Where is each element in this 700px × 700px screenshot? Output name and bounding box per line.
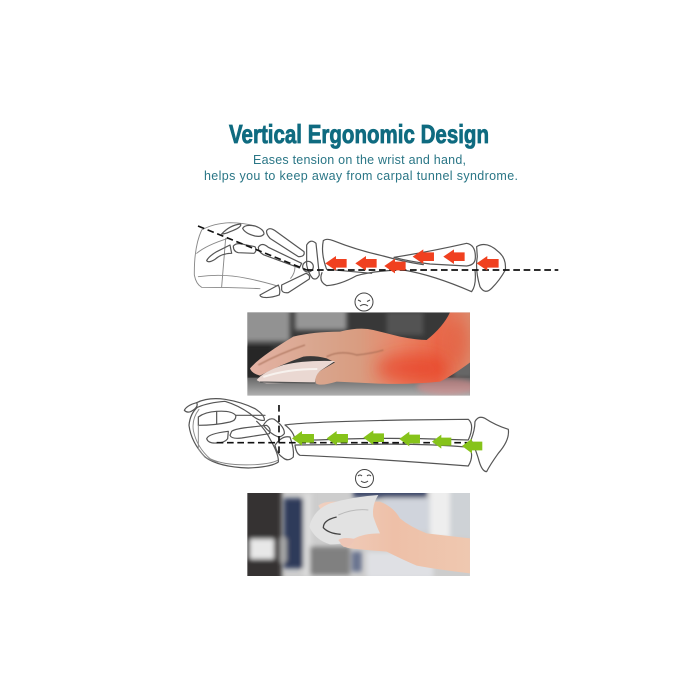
diagram: neutral wrist with vertical mouse (184, 399, 509, 472)
finger and knuckle shading (258, 318, 470, 383)
hand shape (318, 502, 470, 573)
diagram: bent wrist with flat mouse (194, 223, 558, 298)
photo: hand holding vertical mouse (247, 493, 470, 576)
dashed axis lines (217, 405, 470, 455)
mouse shape (257, 361, 335, 383)
forearm bones (285, 417, 509, 472)
subtitle: helps you to keep away from carpal tunnel syndrome. (204, 169, 518, 183)
icon: sad face (355, 293, 373, 311)
mouse shape (309, 495, 380, 544)
subtitle: Eases tension on the wrist and hand, (253, 153, 466, 167)
forearm bones (321, 239, 505, 292)
hand skeleton on vertical mouse (184, 399, 294, 468)
icon: smiling face (356, 470, 374, 488)
dashed axis lines (198, 226, 558, 270)
photo: hand on flat mouse with red wrist (243, 308, 477, 396)
red tension arrows (325, 249, 499, 273)
green relief arrows (292, 430, 482, 453)
hand shape (250, 312, 473, 385)
hand skeleton on flat mouse (194, 223, 319, 298)
subtitle (204, 153, 518, 183)
title: Vertical Ergonomic Design (229, 119, 489, 149)
